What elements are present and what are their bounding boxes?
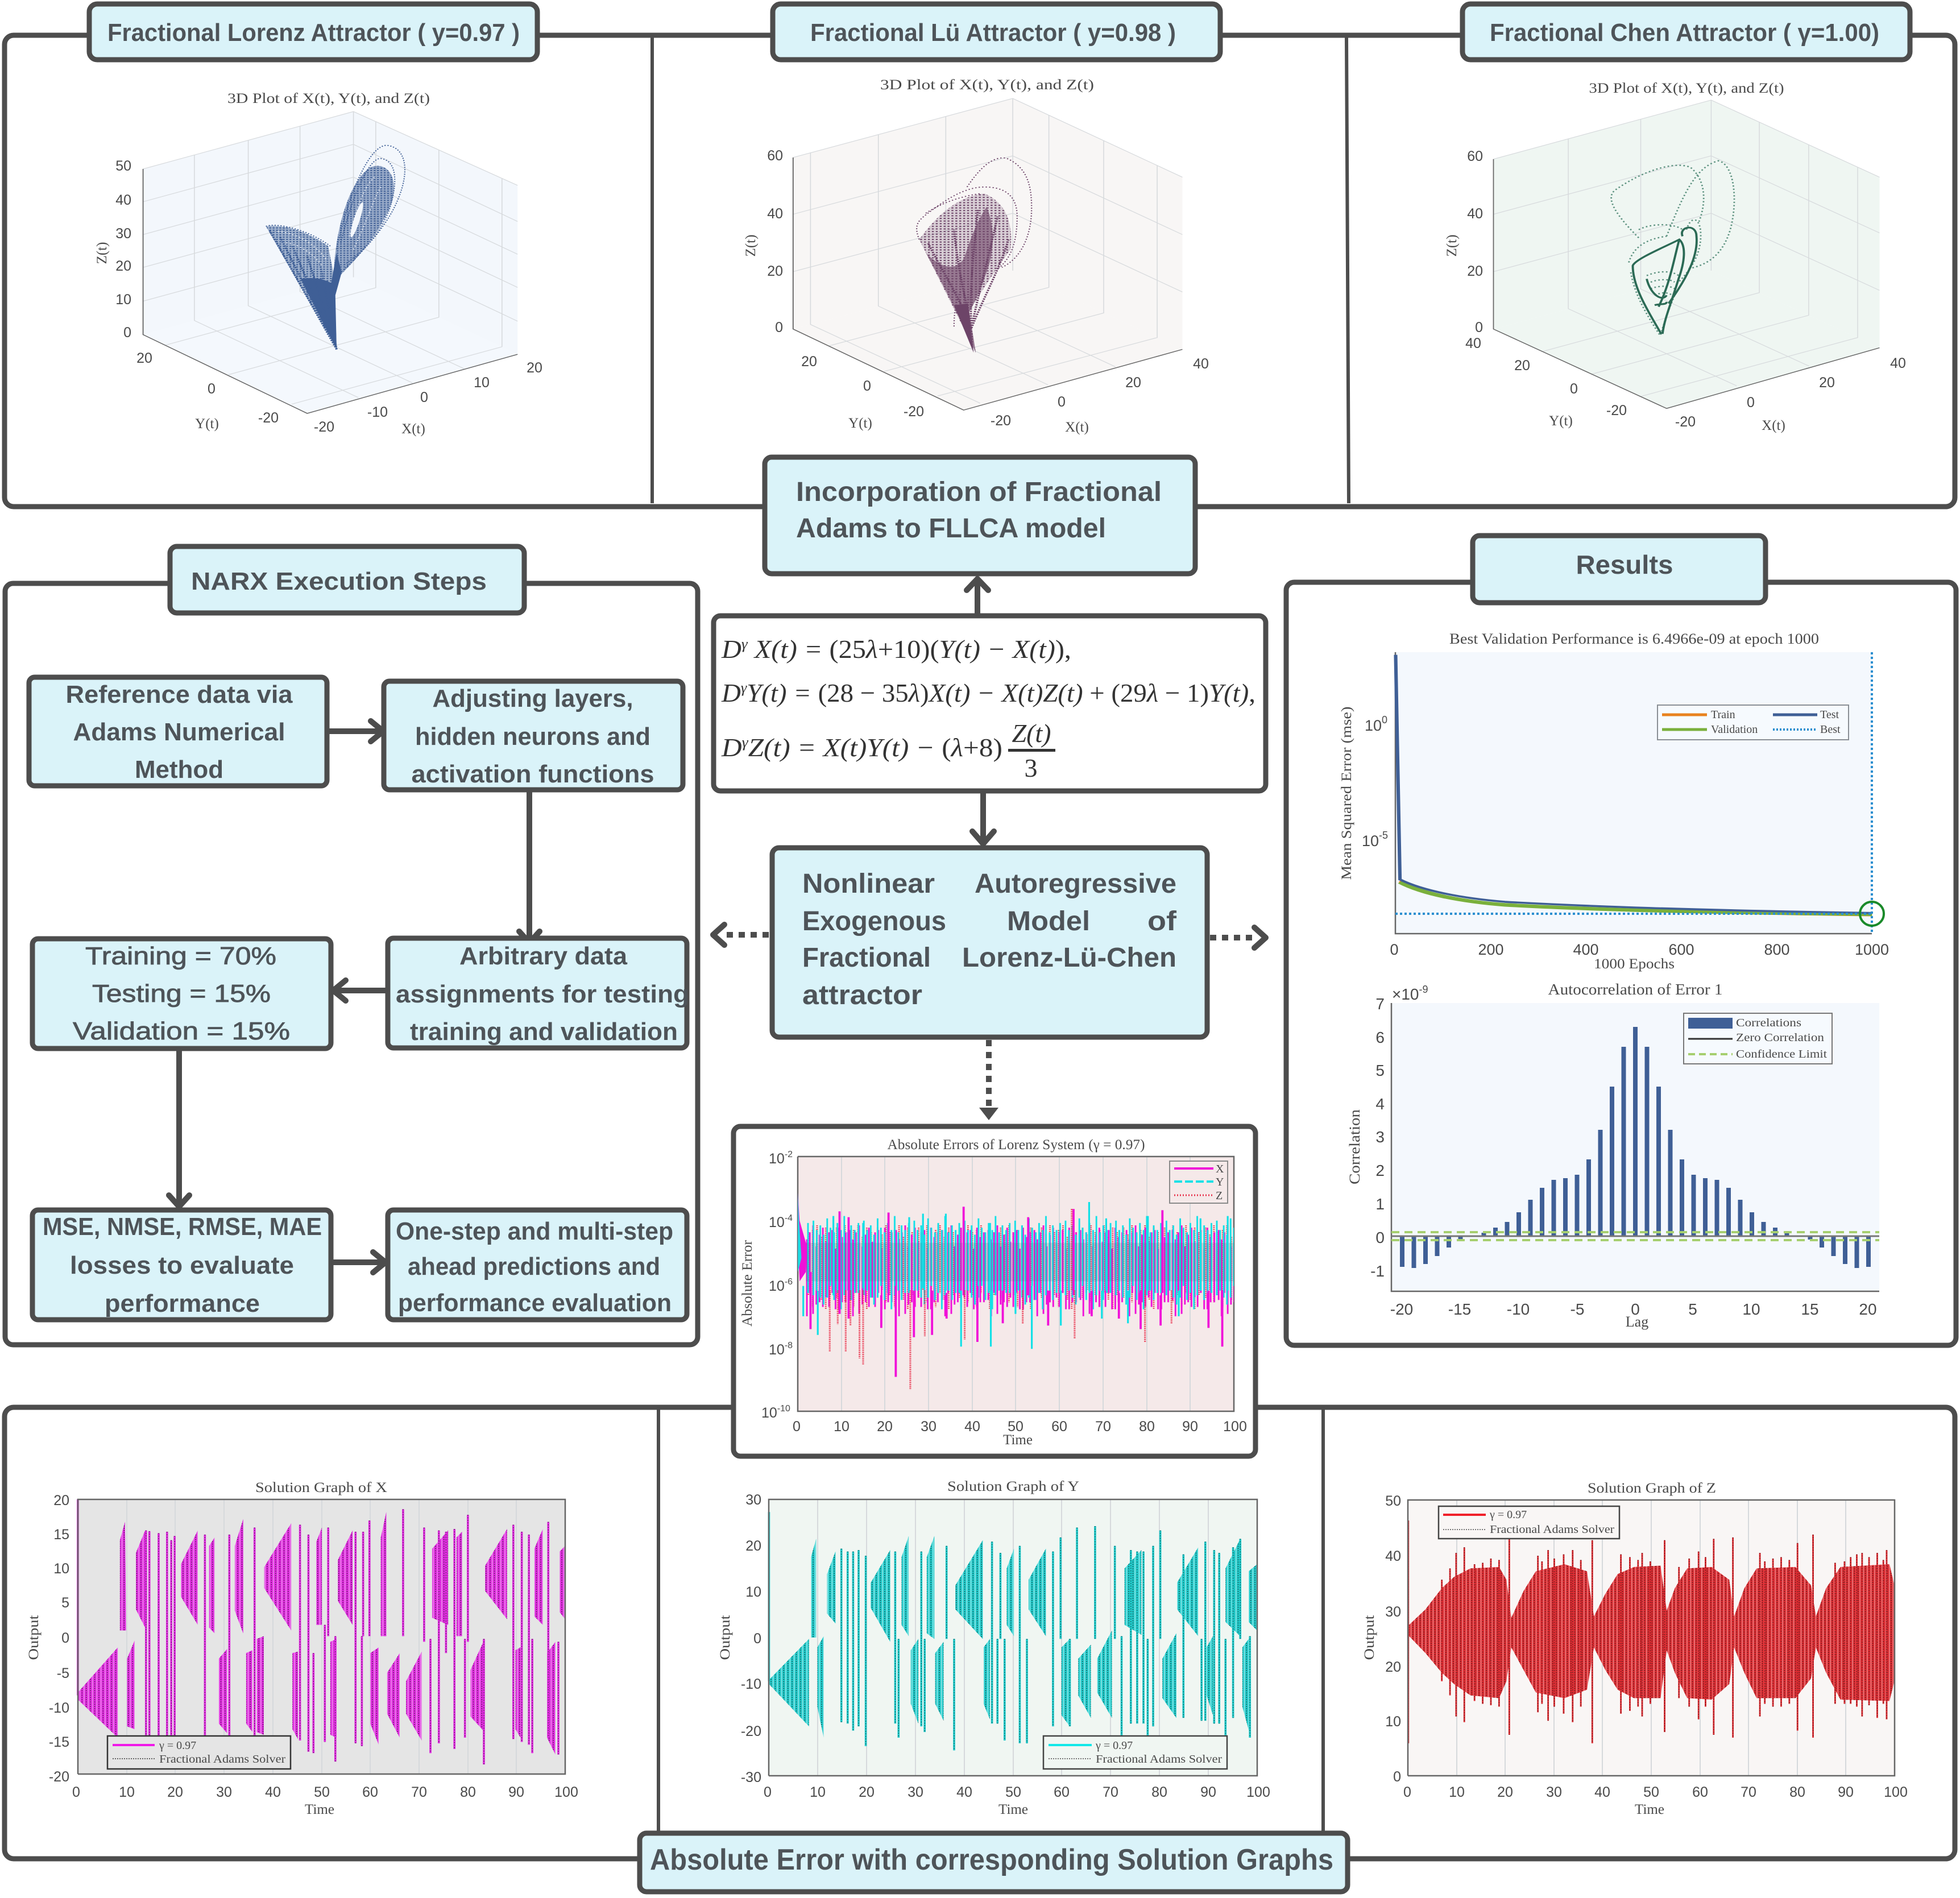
chart: solution graph of X: 70 bbox=[411, 1784, 427, 1800]
chart: autocorrelation of error: 10 bbox=[1742, 1300, 1760, 1318]
box: incorporation of fractional Adams bbox=[765, 457, 1195, 574]
box: data assignment bbox=[388, 938, 689, 1048]
chart: autocorrelation of error bbox=[1346, 981, 1879, 1330]
chart: autocorrelation of error: Correlations bbox=[1736, 1017, 1801, 1029]
chart: solution graph of Y: Solution Graph of Y bbox=[947, 1479, 1079, 1494]
box: train test split: Testing = 15% bbox=[92, 980, 271, 1008]
chart: Lü 3D attractor bbox=[743, 77, 1209, 435]
chart: autocorrelation of error: Confidence Limit bbox=[1736, 1048, 1827, 1060]
panel: absolute errors of Lorenz system: 10 bbox=[834, 1419, 850, 1435]
chart: solution graph of X: 10 bbox=[119, 1784, 135, 1800]
chart: Chen 3D attractor: 20 bbox=[1819, 375, 1835, 391]
chart: autocorrelation of error: -15 bbox=[1448, 1300, 1471, 1318]
chart: Lorenz 3D attractor: 0 bbox=[123, 325, 131, 341]
chart: solution graph of Z: 70 bbox=[1741, 1784, 1756, 1800]
chart: solution graph of Z: 0 bbox=[1403, 1784, 1411, 1800]
panel: absolute errors of Lorenz system: 50 bbox=[1008, 1419, 1023, 1435]
panel: absolute errors of Lorenz system: 10 bbox=[769, 1278, 785, 1294]
chart: solution graph of X: 15 bbox=[53, 1527, 69, 1543]
chart: solution graph of Z: 50 bbox=[1385, 1493, 1401, 1509]
panel: absolute errors of Lorenz system: Y bbox=[1216, 1176, 1224, 1188]
chart: Chen 3D attractor: 60 bbox=[1467, 148, 1483, 164]
chart: solution graph of X: Output bbox=[26, 1615, 42, 1660]
chart: solution graph of Z: 30 bbox=[1546, 1784, 1562, 1800]
chart: autocorrelation of error: -10 bbox=[1507, 1300, 1530, 1318]
arrow: equations to NARX model bbox=[972, 793, 994, 844]
panel: absolute errors of Lorenz system: -8 bbox=[785, 1341, 793, 1350]
chart: autocorrelation of error: 0 bbox=[1375, 1229, 1385, 1246]
chart: solution graph of Z: 0 bbox=[1393, 1769, 1401, 1785]
chart: autocorrelation of error: -5 bbox=[1571, 1300, 1584, 1318]
chart: solution graph of Z: 90 bbox=[1838, 1784, 1854, 1800]
chart: Lorenz 3D attractor: 10 bbox=[474, 375, 490, 391]
box: fractional equations: X(t) = bbox=[748, 635, 830, 664]
box: fractional equations: D bbox=[722, 733, 740, 762]
chart: autocorrelation of error: 5 bbox=[1375, 1062, 1385, 1079]
panel: absolute errors of Lorenz system: 10 bbox=[769, 1215, 785, 1230]
panel: absolute errors of Lorenz system: Z bbox=[1216, 1190, 1223, 1202]
chart: Lorenz 3D attractor bbox=[94, 91, 542, 437]
heading: fractional Lorenz attractor bbox=[89, 4, 537, 60]
box: adjusting layers bbox=[384, 681, 683, 790]
chart: solution graph of Y: 10 bbox=[745, 1584, 761, 1600]
chart: best validation performance: Mean Squared Error (mse) bbox=[1339, 706, 1354, 880]
chart: solution graph of Y: -20 bbox=[741, 1723, 761, 1739]
chart: Lü 3D attractor: -20 bbox=[904, 404, 924, 420]
chart: Lorenz 3D attractor: 0 bbox=[208, 381, 216, 397]
chart: solution graph of Y: 30 bbox=[745, 1492, 761, 1508]
chart: Lü 3D attractor: 3D Plot of X(t), Y(t), and Z(t) bbox=[880, 77, 1094, 93]
box: reference data: Reference data via bbox=[66, 681, 293, 708]
chart: solution graph of Y: 50 bbox=[1005, 1784, 1021, 1800]
box: incorporation of fractional Adams: Incorporation of Fractional bbox=[796, 477, 1162, 507]
heading: fractional Lü attractor: Fractional Lü Attractor ( y=0.98 ) bbox=[810, 19, 1176, 47]
panel: NARX execution steps bbox=[5, 583, 698, 1345]
chart: solution graph of X: Time bbox=[305, 1802, 334, 1817]
box: fractional equations: Z(t) bbox=[1012, 719, 1051, 748]
chart: solution graph of X: 20 bbox=[167, 1784, 183, 1800]
box: fractional equations: D bbox=[722, 678, 740, 707]
chart: autocorrelation of error: -9 bbox=[1419, 984, 1428, 995]
box: predictions: ahead predictions and bbox=[408, 1253, 660, 1280]
arrow: data assignment to split box bbox=[333, 980, 387, 1001]
box: predictions: performance evaluation bbox=[398, 1289, 672, 1317]
chart: Chen 3D attractor: 3D Plot of X(t), Y(t), and Z(t) bbox=[1589, 81, 1784, 96]
chart: autocorrelation of error: 6 bbox=[1375, 1029, 1385, 1046]
chart: best validation performance: 10 bbox=[1362, 832, 1379, 849]
chart: autocorrelation of error: 0 bbox=[1631, 1300, 1640, 1318]
chart: autocorrelation of error: 1 bbox=[1375, 1195, 1385, 1213]
box: reference data: Adams Numerical bbox=[73, 718, 285, 746]
box: NARX model: attractor bbox=[802, 980, 922, 1010]
chart: best validation performance: Validation bbox=[1711, 723, 1758, 736]
chart: Chen 3D attractor: 40 bbox=[1890, 355, 1906, 371]
panel: absolute errors of Lorenz system: X bbox=[1216, 1163, 1224, 1175]
box: fractional equations: Z(t) = X(t)Y(t) − bbox=[748, 733, 942, 762]
panel: absolute errors of Lorenz system: 100 bbox=[1223, 1419, 1247, 1435]
chart: solution graph of X: 50 bbox=[314, 1784, 330, 1800]
chart: solution graph of X: Solution Graph of X bbox=[255, 1480, 387, 1495]
chart: Lorenz 3D attractor: X(t) bbox=[401, 421, 425, 437]
box: train test split bbox=[32, 939, 331, 1049]
chart: solution graph of X: γ = 0.97 bbox=[159, 1739, 196, 1752]
chart: solution graph of Z: 10 bbox=[1385, 1714, 1401, 1730]
chart: best validation performance: 0 bbox=[1382, 714, 1387, 726]
arrow: reference data to adjusting layers bbox=[329, 721, 383, 741]
chart: best validation performance: 10 bbox=[1365, 717, 1382, 734]
box: NARX model: Lorenz-Lü-Chen bbox=[962, 943, 1176, 973]
chart: best validation performance: 800 bbox=[1764, 941, 1790, 958]
box: NARX model: Autoregressive bbox=[975, 869, 1176, 899]
chart: solution graph of Y: 0 bbox=[753, 1631, 761, 1647]
chart: solution graph of Y: Output bbox=[718, 1615, 733, 1660]
chart: Lorenz 3D attractor: 20 bbox=[115, 258, 131, 274]
box: predictions: One-step and multi-step bbox=[396, 1217, 673, 1245]
heading: results: Results bbox=[1576, 550, 1673, 579]
heading: NARX execution steps: NARX Execution Steps bbox=[191, 567, 487, 595]
box: NARX model: Fractional bbox=[802, 943, 931, 973]
chart: solution graph of Z: Output bbox=[1362, 1615, 1377, 1660]
panel: absolute errors of Lorenz system: Absolute Error bbox=[740, 1240, 755, 1327]
box: NARX model bbox=[772, 848, 1207, 1037]
chart: solution graph of Y: 100 bbox=[1246, 1784, 1270, 1800]
arrow: adjusting layers to data assignment bbox=[519, 791, 540, 943]
chart: solution graph of Z bbox=[1362, 1481, 1908, 1817]
box: NARX model: Exogenous bbox=[802, 906, 946, 936]
chart: autocorrelation of error: Autocorrelation of Error 1 bbox=[1548, 981, 1723, 998]
chart: best validation performance: Best Validation Performance is 6.4966e-09 at epoch 1000 bbox=[1449, 631, 1819, 647]
chart: best validation performance: -5 bbox=[1379, 830, 1388, 841]
panel: absolute errors of Lorenz system: 10 bbox=[761, 1405, 777, 1421]
chart: solution graph of Y: Fractional Adams Solver bbox=[1096, 1753, 1222, 1766]
chart: Chen 3D attractor: 0 bbox=[1475, 320, 1483, 335]
box: fractional equations: (λ+8) bbox=[942, 733, 1000, 762]
arrow: dashed to results bbox=[1210, 927, 1266, 948]
heading: fractional Lorenz attractor: Fractional Lorenz Attractor ( y=0.97 ) bbox=[107, 19, 520, 47]
chart: Lorenz 3D attractor: 40 bbox=[115, 192, 131, 208]
chart: solution graph of Z: 80 bbox=[1789, 1784, 1805, 1800]
chart: Lü 3D attractor: 0 bbox=[863, 378, 871, 394]
panel: absolute errors of Lorenz system: -2 bbox=[785, 1150, 793, 1159]
chart: Lorenz 3D attractor: 3D Plot of X(t), Y(t), and Z(t) bbox=[227, 91, 430, 106]
chart: autocorrelation of error: 3 bbox=[1375, 1128, 1385, 1146]
chart: solution graph of Y: 70 bbox=[1103, 1784, 1118, 1800]
heading: fractional Lü attractor bbox=[773, 4, 1220, 60]
panel: absolute errors of Lorenz system: 90 bbox=[1182, 1419, 1198, 1435]
chart: Lorenz 3D attractor: -10 bbox=[367, 404, 388, 420]
box: adjusting layers: hidden neurons and bbox=[415, 723, 650, 751]
chart: Lorenz 3D attractor: Y(t) bbox=[195, 416, 219, 432]
chart: Lorenz 3D attractor: 30 bbox=[115, 226, 131, 242]
chart: Lorenz 3D attractor: 50 bbox=[115, 158, 131, 174]
chart: Lü 3D attractor: -20 bbox=[991, 413, 1011, 429]
chart: solution graph of Z: Fractional Adams Solver bbox=[1490, 1523, 1614, 1536]
chart: solution graph of Z: γ = 0.97 bbox=[1489, 1509, 1527, 1521]
chart: Chen 3D attractor: 20 bbox=[1514, 358, 1530, 374]
arrow: dashed to absolute errors bbox=[979, 1040, 998, 1120]
panel: absolute errors of Lorenz system: 10 bbox=[769, 1342, 785, 1358]
chart: solution graph of X: 20 bbox=[53, 1493, 69, 1509]
chart: best validation performance: Test bbox=[1820, 708, 1839, 721]
box: adjusting layers: Adjusting layers, bbox=[432, 685, 633, 712]
chart: autocorrelation of error: 5 bbox=[1688, 1300, 1697, 1318]
box: train test split: Validation = 15% bbox=[73, 1017, 290, 1045]
box: reference data: Method bbox=[135, 756, 223, 784]
chart: Lü 3D attractor: 40 bbox=[1193, 356, 1209, 372]
chart: solution graph of X: -10 bbox=[49, 1700, 69, 1716]
chart: best validation performance: Train bbox=[1711, 708, 1735, 721]
chart: Chen 3D attractor: X(t) bbox=[1762, 418, 1785, 433]
chart: solution graph of Y: 80 bbox=[1151, 1784, 1167, 1800]
chart: Lü 3D attractor: 20 bbox=[767, 263, 783, 279]
chart: solution graph of X bbox=[26, 1480, 578, 1817]
chart: Lorenz 3D attractor: -20 bbox=[258, 410, 279, 426]
chart: best validation performance: 600 bbox=[1668, 941, 1694, 958]
chart: Lorenz 3D attractor: -20 bbox=[314, 419, 334, 435]
chart: solution graph of X: 60 bbox=[362, 1784, 378, 1800]
arrow: split box to losses bbox=[169, 1051, 189, 1207]
chart: solution graph of X: 80 bbox=[460, 1784, 476, 1800]
heading: fractional Chen attractor: Fractional Chen Attractor ( γ=1.00) bbox=[1490, 19, 1879, 47]
chart: solution graph of Y: 30 bbox=[908, 1784, 923, 1800]
chart: Chen 3D attractor: -20 bbox=[1606, 403, 1627, 418]
chart: Lorenz 3D attractor: 0 bbox=[420, 389, 428, 405]
box: data assignment: Arbitrary data bbox=[459, 942, 628, 970]
chart: solution graph of X: 0 bbox=[61, 1630, 69, 1646]
chart: Lorenz 3D attractor: 20 bbox=[527, 360, 542, 376]
chart: autocorrelation of error: Zero Correlation bbox=[1736, 1031, 1824, 1044]
heading: results bbox=[1473, 536, 1766, 603]
chart: Lü 3D attractor: 40 bbox=[767, 206, 783, 222]
box: incorporation of fractional Adams: Adams to FLLCA model bbox=[796, 513, 1106, 544]
heading: NARX execution steps bbox=[170, 546, 524, 613]
panel: absolute errors of Lorenz system: -4 bbox=[785, 1213, 793, 1223]
chart: solution graph of Z: 60 bbox=[1692, 1784, 1708, 1800]
panel: attractors bbox=[5, 35, 1955, 507]
box: losses: performance bbox=[105, 1290, 260, 1317]
panel: absolute errors of Lorenz system: Time bbox=[1003, 1432, 1033, 1448]
chart: solution graph of Z: 40 bbox=[1594, 1784, 1610, 1800]
chart: solution graph of Y: 60 bbox=[1054, 1784, 1070, 1800]
chart: solution graph of Z: 40 bbox=[1385, 1548, 1401, 1564]
chart: solution graph of X: -20 bbox=[49, 1769, 69, 1785]
chart: Lü 3D attractor: 20 bbox=[1125, 375, 1141, 391]
chart: Lü 3D attractor: 60 bbox=[767, 148, 783, 164]
box: fractional equations: Y(t) = bbox=[747, 678, 818, 707]
chart: solution graph of Y: 20 bbox=[745, 1538, 761, 1554]
chart: autocorrelation of error: 2 bbox=[1375, 1162, 1385, 1179]
chart: Chen 3D attractor: 40 bbox=[1467, 206, 1483, 222]
chart: solution graph of Z: 30 bbox=[1385, 1604, 1401, 1620]
chart: Lü 3D attractor: 0 bbox=[775, 320, 783, 335]
chart: best validation performance: 1000 bbox=[1855, 941, 1889, 958]
chart: best validation performance: 200 bbox=[1478, 941, 1504, 958]
chart: solution graph of Y: -30 bbox=[741, 1769, 761, 1785]
chart: solution graph of Z: Time bbox=[1635, 1802, 1664, 1817]
chart: solution graph of X: 90 bbox=[508, 1784, 524, 1800]
panel: absolute error and solution graphs bbox=[5, 1407, 1955, 1859]
chart: solution graph of Y: 40 bbox=[956, 1784, 972, 1800]
chart: autocorrelation of error: Lag bbox=[1626, 1313, 1648, 1330]
chart: autocorrelation of error: -20 bbox=[1390, 1300, 1413, 1318]
chart: Lü 3D attractor: Z(t) bbox=[743, 235, 759, 256]
chart: Lorenz 3D attractor: 20 bbox=[136, 350, 152, 366]
chart: Lü 3D attractor: X(t) bbox=[1065, 420, 1089, 435]
chart: Chen 3D attractor: Y(t) bbox=[1549, 413, 1573, 429]
panel: absolute errors of Lorenz system: 10 bbox=[769, 1151, 785, 1167]
chart: autocorrelation of error: 4 bbox=[1375, 1095, 1385, 1113]
panel: absolute errors of Lorenz system: 0 bbox=[793, 1419, 801, 1435]
box: predictions bbox=[388, 1210, 687, 1320]
panel: absolute errors of Lorenz system: Absolute Errors of Lorenz System (γ = 0.97) bbox=[887, 1137, 1145, 1153]
chart: Chen 3D attractor: 0 bbox=[1747, 395, 1755, 411]
chart: solution graph of Y: Time bbox=[998, 1802, 1028, 1817]
chart: solution graph of Y bbox=[718, 1479, 1270, 1817]
chart: solution graph of X: 30 bbox=[216, 1784, 232, 1800]
chart: autocorrelation of error: 20 bbox=[1859, 1300, 1877, 1318]
chart: solution graph of Y: γ = 0.97 bbox=[1095, 1739, 1133, 1752]
chart: Chen 3D attractor: 20 bbox=[1467, 263, 1483, 279]
panel: absolute errors of Lorenz system: 30 bbox=[921, 1419, 937, 1435]
box: NARX model: of bbox=[1147, 906, 1177, 936]
chart: autocorrelation of error: 7 bbox=[1375, 995, 1385, 1013]
arrow: dashed to NARX execution steps bbox=[713, 925, 769, 945]
chart: solution graph of Z: 100 bbox=[1884, 1784, 1908, 1800]
box: fractional equations: (28 − 35λ)X(t) − X(t)Z(t) + (29λ − 1)Y(t), bbox=[818, 678, 1255, 707]
chart: solution graph of X: 100 bbox=[554, 1784, 578, 1800]
chart: Chen 3D attractor: 0 bbox=[1570, 381, 1578, 397]
chart: Lorenz 3D attractor: Z(t) bbox=[94, 242, 110, 264]
chart: solution graph of Y: 10 bbox=[810, 1784, 826, 1800]
chart: solution graph of X: 40 bbox=[265, 1784, 281, 1800]
chart: autocorrelation of error: ×10 bbox=[1392, 985, 1419, 1003]
chart: Lü 3D attractor: 20 bbox=[801, 354, 817, 370]
box: adjusting layers: activation functions bbox=[412, 760, 654, 788]
panel: absolute errors of Lorenz system: 20 bbox=[877, 1419, 893, 1435]
box: fractional equations: γ bbox=[741, 636, 748, 652]
chart: solution graph of Y: 0 bbox=[764, 1784, 772, 1800]
chart: best validation performance: 1000 Epochs bbox=[1594, 956, 1675, 972]
chart: Lorenz 3D attractor: 10 bbox=[115, 292, 131, 308]
box: fractional equations: γ bbox=[742, 734, 748, 751]
chart: solution graph of X: 5 bbox=[61, 1595, 69, 1611]
box: losses: MSE, NMSE, RMSE, MAE bbox=[43, 1213, 322, 1241]
panel: absolute errors of Lorenz system: 60 bbox=[1051, 1419, 1067, 1435]
chart: solution graph of X: Fractional Adams Solver bbox=[159, 1753, 285, 1766]
chart: solution graph of Y: 20 bbox=[859, 1784, 875, 1800]
heading: absolute error with corresponding solution graphs bbox=[640, 1833, 1348, 1892]
box: fractional equations: γ bbox=[741, 679, 747, 696]
box: NARX model: Model bbox=[1007, 906, 1090, 936]
chart: solution graph of X: -15 bbox=[49, 1734, 69, 1750]
arrow: losses to predictions bbox=[333, 1252, 386, 1273]
chart: best validation performance: Best bbox=[1820, 723, 1841, 736]
chart: autocorrelation of error: Correlation bbox=[1346, 1109, 1363, 1184]
box: data assignment: training and validation bbox=[410, 1018, 678, 1046]
heading: absolute error with corresponding solution graphs: Absolute Error with corresponding Solution Graphs bbox=[650, 1843, 1333, 1876]
panel: results bbox=[1286, 582, 1956, 1345]
panel: absolute errors of Lorenz system: 80 bbox=[1139, 1419, 1155, 1435]
chart: solution graph of Z: 20 bbox=[1497, 1784, 1513, 1800]
chart: Chen 3D attractor bbox=[1444, 81, 1906, 433]
box: train test split: Training = 70% bbox=[85, 942, 276, 970]
panel: absolute errors of Lorenz system bbox=[734, 1126, 1255, 1456]
box: fractional equations: D bbox=[722, 635, 740, 664]
box: fractional equations bbox=[714, 616, 1266, 791]
box: NARX model: Nonlinear bbox=[802, 869, 935, 899]
box: losses: losses to evaluate bbox=[70, 1251, 294, 1279]
chart: Chen 3D attractor: -20 bbox=[1675, 414, 1696, 430]
chart: Chen 3D attractor: Z(t) bbox=[1444, 235, 1460, 256]
chart: solution graph of Z: 50 bbox=[1643, 1784, 1659, 1800]
panel: absolute errors of Lorenz system: -6 bbox=[785, 1277, 793, 1287]
box: fractional equations: (25λ+10)(Y(t) − X(t)), bbox=[830, 635, 1071, 664]
box: losses bbox=[32, 1210, 331, 1320]
chart: solution graph of Z: Solution Graph of Z bbox=[1588, 1481, 1716, 1496]
chart: solution graph of Y: 90 bbox=[1200, 1784, 1216, 1800]
chart: best validation performance: 0 bbox=[1390, 941, 1399, 958]
chart: solution graph of Z: 20 bbox=[1385, 1659, 1401, 1675]
arrow: equations to incorporation box bbox=[967, 579, 988, 615]
chart: Chen 3D attractor: 40 bbox=[1465, 335, 1481, 351]
chart: Lü 3D attractor: Y(t) bbox=[848, 416, 872, 431]
panel: absolute errors of Lorenz system: 40 bbox=[964, 1419, 980, 1435]
panel: absolute errors of Lorenz system: -10 bbox=[777, 1404, 790, 1414]
box: reference data bbox=[29, 677, 327, 786]
chart: Lü 3D attractor: 0 bbox=[1058, 394, 1066, 410]
chart: solution graph of Z: 10 bbox=[1449, 1784, 1465, 1800]
chart: autocorrelation of error: 15 bbox=[1801, 1300, 1819, 1318]
chart: solution graph of X: 0 bbox=[72, 1784, 80, 1800]
heading: fractional Chen attractor bbox=[1462, 4, 1910, 60]
box: data assignment: assignments for testing bbox=[396, 980, 689, 1008]
chart: solution graph of Y: -10 bbox=[741, 1676, 761, 1692]
box: fractional equations: 3 bbox=[1025, 753, 1037, 782]
chart: best validation performance: 400 bbox=[1573, 941, 1599, 958]
chart: solution graph of X: 10 bbox=[53, 1561, 69, 1577]
panel: absolute errors of Lorenz system: 70 bbox=[1095, 1419, 1111, 1435]
chart: solution graph of X: -5 bbox=[57, 1665, 69, 1681]
chart: best validation performance bbox=[1339, 631, 1889, 972]
chart: autocorrelation of error: -1 bbox=[1370, 1262, 1385, 1280]
